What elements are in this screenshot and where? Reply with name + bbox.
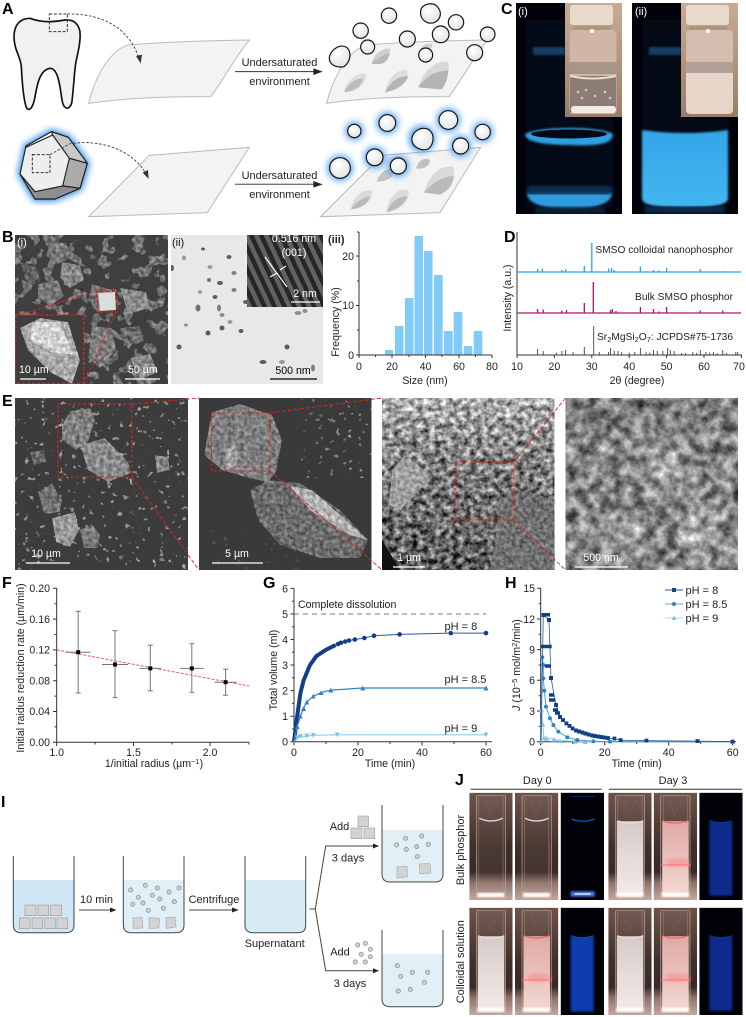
panel F: radius reduction rate chart [2, 575, 249, 770]
scale labels [19, 364, 158, 376]
H legend: pH = 8.5 [686, 599, 727, 611]
arrow: 10 min [79, 894, 116, 912]
panel label J: J [455, 772, 464, 789]
beaker with dissolving particles [123, 856, 184, 933]
F axis titles: −1 [191, 757, 200, 766]
column header Day 3: Day 3 [659, 775, 687, 787]
SEM image 1 [15, 398, 188, 570]
histogram tick labels: 20 [386, 361, 398, 373]
icon: tooth [14, 18, 80, 109]
F tick labels: 0.04 [29, 706, 50, 718]
G tick labels: 40 [416, 747, 428, 759]
XRD series labels: Bulk SMSO phosphor [635, 292, 734, 303]
H tick labels: 60 [727, 747, 739, 759]
H legend: pH = 9 [686, 613, 718, 625]
row label bulk phosphor: Bulk phosphor [455, 815, 467, 885]
enamel surface after dissolution [327, 40, 488, 103]
XRD series labels: Sr [597, 332, 607, 343]
add bulk phosphor note: 3 days [332, 852, 365, 864]
zoom box [455, 462, 514, 520]
blue glow around phosphor crystal [20, 132, 87, 199]
panel labels (i) (ii): (i) [518, 6, 528, 18]
XRD series labels: : JCPDS#75-1736 [651, 332, 733, 343]
XRD series labels: O [639, 332, 647, 343]
phosphor surface after dissolution [321, 147, 481, 217]
XRD series labels [595, 245, 734, 344]
dashed arrow from crystal [50, 143, 149, 179]
F fit line [57, 650, 249, 686]
zoom inset [15, 315, 84, 384]
H legend [665, 585, 727, 625]
scale labels: 10 µm [19, 364, 49, 376]
XRD reference sticks [538, 326, 738, 355]
SEM image 4 [566, 398, 738, 570]
panel label A: A [2, 1, 14, 18]
label (i): (i) [17, 237, 27, 249]
XRD axis titles [502, 264, 664, 387]
red dashed boxes [16, 291, 117, 383]
F axis titles: Initial raidus reduction rate (µm/min) [15, 583, 27, 753]
label: undersaturated environment (top): environment [249, 76, 310, 88]
beaker with bulk phosphor cubes [13, 856, 74, 933]
F tick labels [29, 583, 217, 759]
scale bar [212, 548, 263, 563]
row label colloidal solution: Colloidal solution [455, 920, 467, 1003]
H axis titles: mol/m [511, 647, 523, 679]
add bulk phosphor note: Add [330, 821, 349, 833]
scale bar: 10 µm [31, 548, 61, 560]
XRD tick labels: 10 [511, 361, 523, 373]
XRD series labels: 2 [635, 335, 639, 344]
XRD axis titles: Intensity (a.u.) [502, 264, 514, 332]
arrow: centrifuge: Centrifuge [189, 894, 239, 906]
XRD y axis [516, 232, 518, 355]
G tick labels: 0 [282, 736, 288, 748]
panel B(iii): size histogram [328, 232, 498, 387]
H series pH 8 [541, 615, 733, 742]
panel label C: C [501, 1, 513, 18]
histogram axis titles: Frequency (%) [330, 287, 342, 357]
H series pH 9 [541, 710, 733, 742]
F error bars [66, 611, 237, 698]
column header Day 0: Day 0 [523, 775, 552, 787]
SEM image 3 [382, 398, 554, 570]
scale bar 500 nm: 500 nm [275, 365, 311, 377]
G complete dissolution line [294, 613, 486, 615]
H tick labels: 0 [529, 736, 535, 748]
G series labels: pH = 9 [444, 723, 477, 735]
label: undersaturated environment (top): Undersaturated [242, 57, 317, 69]
lattice HRTEM inset: 2 nm [293, 288, 317, 300]
histogram tick labels: 0 [348, 350, 354, 362]
label (ii): (ii) [172, 237, 184, 249]
G tick labels: 1 [282, 711, 288, 723]
cuvette grid colloidal solution row [469, 908, 743, 1015]
G curve pH 8.5 [294, 688, 486, 742]
label: supernatant: Supernatant [245, 938, 305, 950]
add bulk phosphor note [330, 816, 375, 864]
G curve pH 9 [294, 735, 486, 742]
histogram tick labels: 80 [486, 361, 498, 373]
histogram tick labels: 60 [453, 361, 465, 373]
scale bar [393, 552, 425, 567]
bright particle in zoom box [98, 292, 116, 311]
panel label I: I [1, 794, 5, 811]
scale bar [26, 548, 70, 563]
F tick labels: 0.16 [29, 614, 50, 626]
H tick labels: 0 [538, 747, 544, 759]
zoom box [58, 404, 132, 477]
H tick labels: 20 [599, 747, 611, 759]
cuvette grid bulk phosphor row [469, 793, 743, 900]
XRD series labels: SMSO colloidal nanophosphor [595, 245, 734, 256]
scale bars [20, 378, 160, 380]
XRD tick labels: 40 [623, 361, 635, 373]
F axis titles: ) [200, 758, 203, 770]
label (iii): (iii) [328, 234, 345, 246]
scale bar: 500 nm [583, 552, 619, 564]
G tick labels: 3 [282, 660, 288, 672]
G tick labels: 2 [282, 686, 288, 698]
beaker with supernatant [245, 856, 306, 933]
scale bar [575, 552, 628, 567]
H axis titles: −5 [510, 679, 519, 687]
blue glow around released particles [327, 108, 493, 181]
lattice HRTEM inset [247, 233, 323, 307]
scale labels: 50 µm [128, 364, 158, 376]
histogram tick labels: 40 [420, 361, 431, 373]
H tick labels: 12 [523, 614, 535, 626]
XRD tick labels: 60 [698, 361, 710, 373]
G axis titles: Time (min) [365, 758, 415, 770]
panel A: dissolution schematic [2, 1, 495, 217]
F axis titles: 1/initial radius (µm [105, 758, 191, 770]
G label complete dissolution: Complete dissolution [298, 599, 396, 611]
icon: phosphor crystal [20, 132, 87, 199]
histogram bars [385, 236, 482, 355]
H tick labels: 15 [523, 583, 535, 595]
column header Day 3 [609, 775, 742, 789]
lattice HRTEM inset: (001) [282, 247, 306, 259]
G tick labels [282, 584, 492, 759]
XRD x axis [517, 355, 742, 358]
process arrows [235, 68, 323, 188]
label: undersaturated environment (bottom): environment [249, 189, 310, 201]
G curve pH 8 [294, 633, 486, 742]
G tick labels: 4 [282, 634, 288, 646]
beaker result: bulk phosphor added [382, 805, 443, 882]
F axes [53, 588, 249, 746]
dashed box on tooth [49, 14, 67, 32]
G series labels: pH = 8.5 [444, 674, 486, 686]
vial photo (ii) [632, 3, 738, 214]
F tick labels: 2.0 [203, 747, 217, 759]
G tick labels: 60 [480, 747, 492, 759]
lattice HRTEM inset: 0.516 nm [272, 233, 316, 245]
released phosphor particles [330, 111, 490, 178]
panel B(i): SEM image of bulk phosphor [15, 235, 168, 384]
arrow: centrifuge [189, 894, 239, 912]
G tick labels: 5 [282, 609, 288, 621]
inset photo of vial (ii) [681, 3, 738, 117]
enamel surface before dissolution [89, 40, 249, 103]
panel labels (i) (ii) [518, 6, 647, 18]
H axes [537, 588, 736, 746]
G axes [290, 588, 492, 746]
enamel dissolution fragments [329, 4, 495, 67]
dashed box on crystal [32, 155, 50, 173]
zoom box [212, 413, 270, 471]
histogram tick labels: 10 [342, 300, 354, 312]
H series pH 8.5 [541, 657, 733, 742]
dashed arrow from tooth [67, 14, 142, 63]
G series labels [444, 621, 486, 735]
branching arrows [309, 844, 379, 973]
H tick labels: 40 [663, 747, 675, 759]
F tick labels: 1.5 [126, 747, 141, 759]
XRD trace: bulk [517, 282, 741, 313]
H tick labels [523, 583, 739, 759]
histogram tick labels [342, 251, 498, 373]
scale bar 500 nm [270, 365, 317, 379]
panel label F: F [2, 575, 12, 592]
panel H: dissolution flux chart [505, 575, 739, 770]
XRD series labels: MgSi [611, 332, 635, 343]
F tick labels: 0.08 [29, 676, 50, 688]
F tick labels: 1.0 [49, 747, 64, 759]
XRD axis titles: 2θ (degree) [610, 375, 664, 387]
H tick labels: 9 [529, 644, 535, 656]
panel label B: B [2, 229, 14, 246]
F data points [76, 650, 228, 684]
panel label D: D [504, 229, 516, 246]
add nanoparticles note: 3 days [334, 978, 367, 990]
G tick labels: 20 [352, 747, 364, 759]
H axis titles: J (10 [511, 687, 523, 711]
XRD tick labels: 50 [661, 361, 673, 373]
zoom connector lines [19, 291, 116, 384]
histogram axis titles [330, 287, 448, 387]
beaker result: nanoparticles added [382, 930, 443, 1007]
G axis titles [268, 630, 415, 770]
add nanoparticles note: Add [330, 947, 350, 959]
H axis titles [510, 619, 662, 770]
XRD series labels: 7 [647, 335, 651, 344]
panel D: XRD patterns [502, 229, 745, 387]
scale bar: 5 µm [225, 548, 249, 560]
label: undersaturated environment (bottom): Undersaturated [242, 170, 317, 182]
H axis titles: 2 [510, 643, 519, 647]
F tick labels: 0.12 [29, 644, 50, 656]
XRD tick labels: 70 [733, 361, 745, 373]
histogram axis titles: Size (nm) [402, 375, 448, 387]
panel I: experiment workflow [1, 794, 443, 1007]
XRD trace: colloidal [517, 243, 741, 272]
panel G: total volume chart [263, 575, 492, 770]
column header Day 0 [471, 775, 602, 789]
SEM image 2 [199, 398, 372, 570]
scale bar: 1 µm [397, 552, 421, 564]
XRD tick labels: 20 [549, 361, 560, 373]
arrow: 10 min: 10 min [80, 894, 113, 906]
panel E: SEM zoom series [2, 393, 738, 570]
dark nanoparticles [170, 248, 315, 372]
G axis titles: Total volume (ml) [268, 630, 280, 710]
XRD tick labels [511, 361, 745, 373]
G series labels: pH = 8 [444, 621, 477, 633]
G tick labels: 6 [282, 584, 288, 596]
panel label E: E [2, 393, 13, 410]
panel J: cuvette photographs [455, 772, 743, 1015]
inset photo of vial (i) [565, 3, 622, 117]
panel label H: H [505, 575, 517, 592]
F tick labels: 0.20 [29, 583, 50, 595]
H legend: pH = 8 [686, 585, 718, 597]
F tick labels: 0.00 [29, 737, 50, 749]
vial photo (i) [516, 3, 622, 214]
panel labels (i) (ii): (ii) [635, 6, 647, 18]
phosphor surface before dissolution [89, 147, 249, 217]
histogram tick labels: 20 [342, 251, 354, 263]
schematic drawing A (tooth, crystal, surfaces) [14, 4, 495, 217]
XRD tick labels: 30 [586, 361, 598, 373]
H axis titles: Time (min) [612, 758, 662, 770]
XRD series labels: 2 [607, 335, 611, 344]
H tick labels: 3 [529, 706, 535, 718]
G tick labels: 0 [291, 747, 297, 759]
red zoom connector lines [132, 398, 566, 570]
histogram axes [356, 232, 492, 358]
panel B(ii): TEM image [171, 233, 323, 384]
panel C: vial photographs under UV [501, 1, 738, 214]
H axis titles: /min) [511, 619, 523, 643]
add nanoparticles note [330, 941, 372, 990]
histogram tick labels: 0 [356, 361, 362, 373]
F axis titles [15, 583, 203, 770]
H tick labels: 6 [529, 675, 535, 687]
panel label G: G [263, 575, 275, 592]
